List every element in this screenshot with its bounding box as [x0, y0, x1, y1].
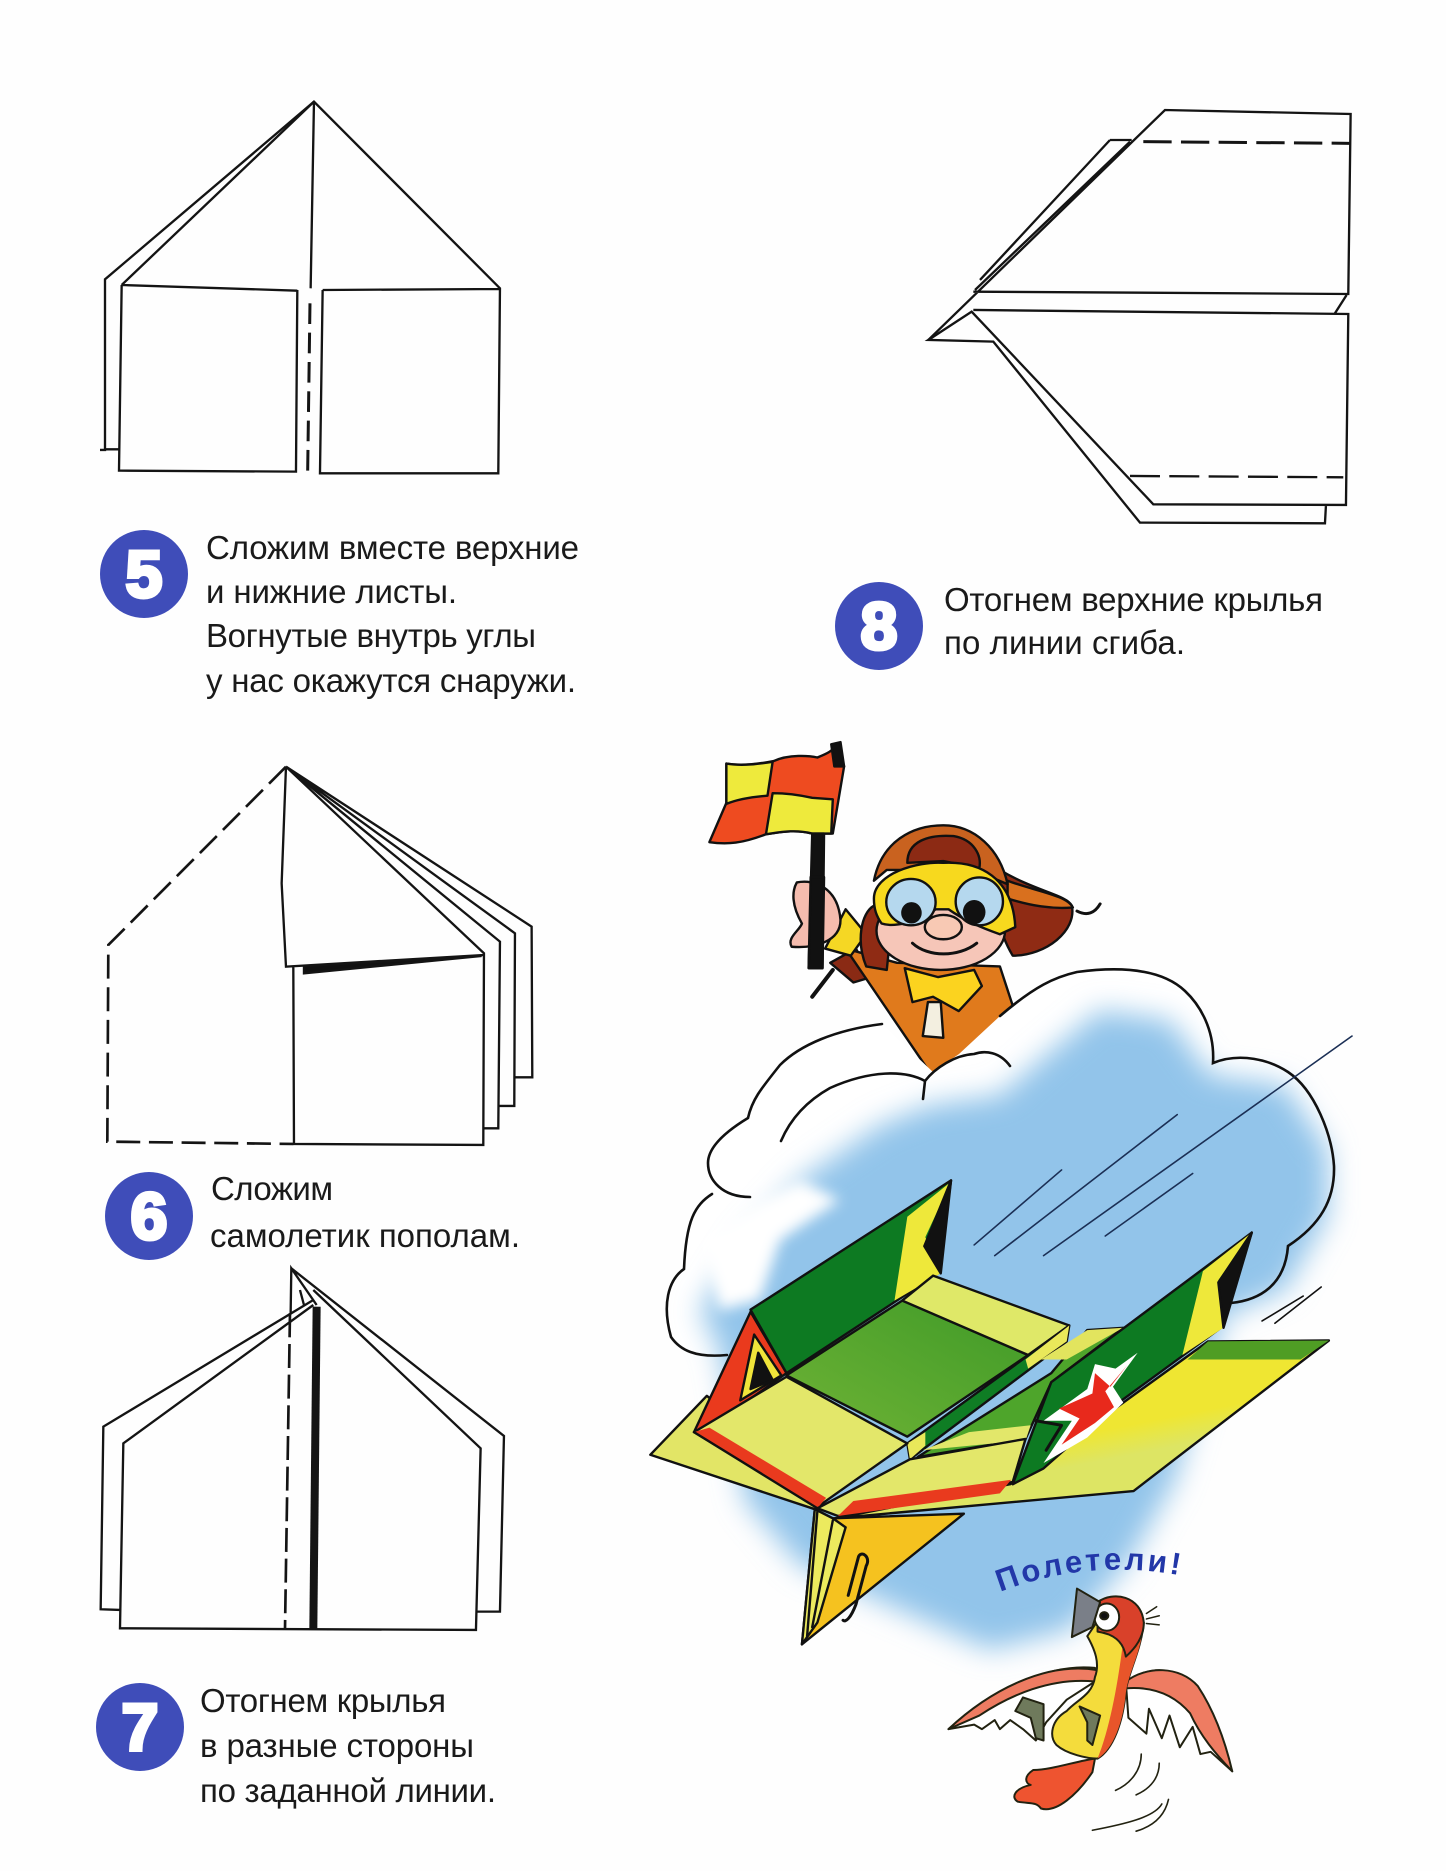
badge: number 8 — [835, 582, 923, 670]
figure: pilot body — [790, 877, 1013, 1077]
bird tail — [1014, 1759, 1095, 1809]
motion lines — [1092, 1754, 1168, 1831]
diagram: step 7 fold wings — [101, 1268, 504, 1630]
text: step 5 instruction — [206, 529, 579, 699]
badge: number 5 — [100, 530, 188, 618]
bird right wing — [1126, 1670, 1232, 1771]
text: step 5 instruction: и нижние листы. — [206, 573, 457, 610]
text: step 6 instruction: Сложим — [211, 1170, 333, 1207]
text: step 8 instruction — [944, 581, 1323, 661]
badge: number 6: 6 — [131, 1179, 167, 1253]
text: step 8 instruction: по линии сгиба. — [944, 624, 1185, 661]
cloud white fill with notch — [667, 969, 1334, 1356]
cloud blue watercolor wash — [700, 1010, 1328, 1650]
plane inner right panels — [817, 1328, 1123, 1516]
text: step 5 instruction: у нас окажутся снаружи. — [206, 662, 576, 699]
illustration: bird — [948, 1589, 1232, 1831]
badge: number 7: 7 — [122, 1690, 158, 1764]
speed lines — [974, 1036, 1352, 1256]
figure: pilot head — [861, 825, 1100, 970]
text: step 7 instruction: в разные стороны — [200, 1727, 474, 1764]
badge: number 8: 8 — [861, 589, 897, 663]
illustration: cloud — [667, 969, 1334, 1650]
text: step 7 instruction — [200, 1682, 496, 1809]
label: Полетели! — [995, 1552, 1180, 1592]
illustration: paper plane — [650, 1180, 1329, 1644]
small wake lines — [1262, 1287, 1321, 1323]
diagram: step 5 folded sheet — [100, 102, 500, 473]
bird left wing — [948, 1667, 1098, 1740]
plane center roof — [787, 1276, 1069, 1459]
text: step 7 instruction: Отогнем крылья — [200, 1682, 446, 1719]
plane nose triangle — [694, 1312, 787, 1432]
illustration: pilot with flag — [709, 742, 1100, 1077]
diagram: step 6 fold in half — [107, 767, 532, 1145]
bird head — [1098, 1596, 1144, 1657]
text: step 5 instruction: Сложим вместе верхние — [206, 529, 579, 566]
bird feet — [1015, 1697, 1100, 1745]
bird body — [1052, 1614, 1144, 1759]
cloud outline — [667, 969, 1334, 1356]
badge: number 5: 5 — [126, 537, 162, 611]
diagram: step 8 folded plane — [928, 110, 1351, 523]
text: step 6 instruction — [210, 1170, 520, 1254]
icon: flag — [709, 742, 844, 968]
plane left fin — [751, 1180, 951, 1373]
text: step 8 instruction: Отогнем верхние крылья — [944, 581, 1323, 618]
plane keel — [802, 1509, 964, 1644]
text: step 7 instruction: по заданной линии. — [200, 1772, 496, 1809]
text: step 6 instruction: самолетик пополам. — [210, 1217, 520, 1254]
bird beak — [1072, 1589, 1100, 1637]
text: step 5 instruction: Вогнутые внутрь углы — [206, 617, 536, 654]
badge: number 6 — [105, 1172, 193, 1260]
plane right wing — [835, 1340, 1329, 1518]
plane left wing — [650, 1396, 830, 1509]
plane right fin — [1013, 1233, 1252, 1484]
icon: red star — [1036, 1353, 1138, 1463]
badge: number 7 — [96, 1683, 184, 1771]
plane front panel — [694, 1377, 907, 1508]
cloud white highlight — [700, 1180, 840, 1310]
label: Полетели!: Полетели! — [995, 1552, 1180, 1592]
